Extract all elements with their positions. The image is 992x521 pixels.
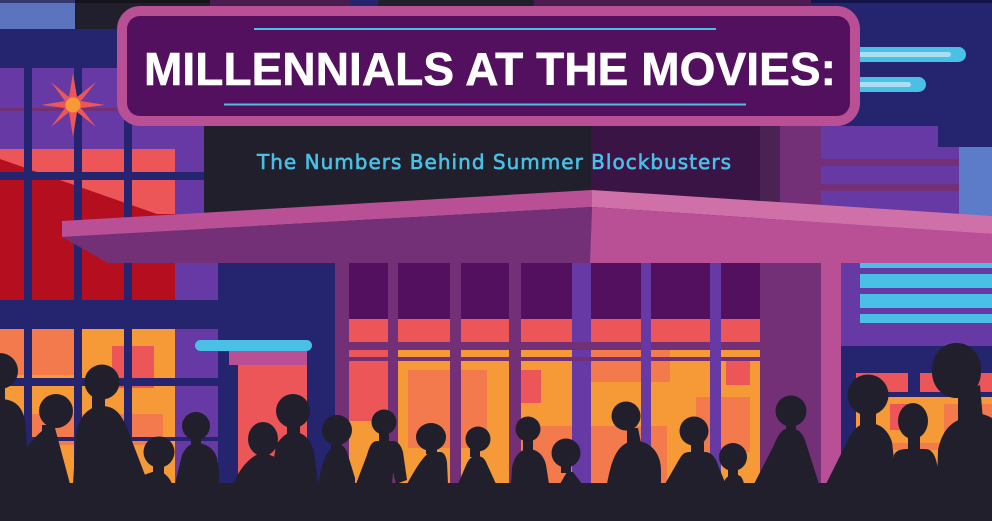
person 3 xyxy=(73,364,145,484)
subtitle: The Numbers Behind Summer Blockbusters xyxy=(256,150,731,174)
person 9 xyxy=(356,410,407,484)
person 17 xyxy=(754,396,819,484)
right columns and side building xyxy=(760,226,992,483)
floor xyxy=(0,483,992,521)
person 5 xyxy=(175,412,219,484)
person 4 xyxy=(133,436,174,484)
crowd silhouettes xyxy=(0,343,992,484)
right upper building xyxy=(700,0,992,227)
theatre back wall xyxy=(204,0,821,240)
icon: star xyxy=(41,73,105,137)
person 14 xyxy=(607,402,661,484)
person 11 xyxy=(458,426,496,484)
cinema roof xyxy=(62,190,992,263)
title: MILLENNIALS AT THE MOVIES: xyxy=(144,43,836,95)
speed line: lower xyxy=(840,77,926,92)
person 12 xyxy=(511,416,549,484)
person 18 xyxy=(826,374,897,484)
person 2 xyxy=(20,394,73,484)
person 10 xyxy=(407,423,448,484)
speed line: upper xyxy=(840,47,966,62)
person 20 xyxy=(932,343,992,484)
person 16 xyxy=(719,443,747,484)
central cinema windows xyxy=(335,240,760,483)
person 19 xyxy=(892,403,938,484)
person 1 xyxy=(0,353,30,484)
person 7 xyxy=(270,394,318,484)
person 8 xyxy=(318,415,355,484)
navy lobby wall with kiosk xyxy=(195,240,335,483)
person 6 xyxy=(233,422,282,484)
left building xyxy=(0,0,218,483)
title sign xyxy=(117,6,860,126)
person 15 xyxy=(665,416,724,484)
person 13 xyxy=(552,438,582,484)
